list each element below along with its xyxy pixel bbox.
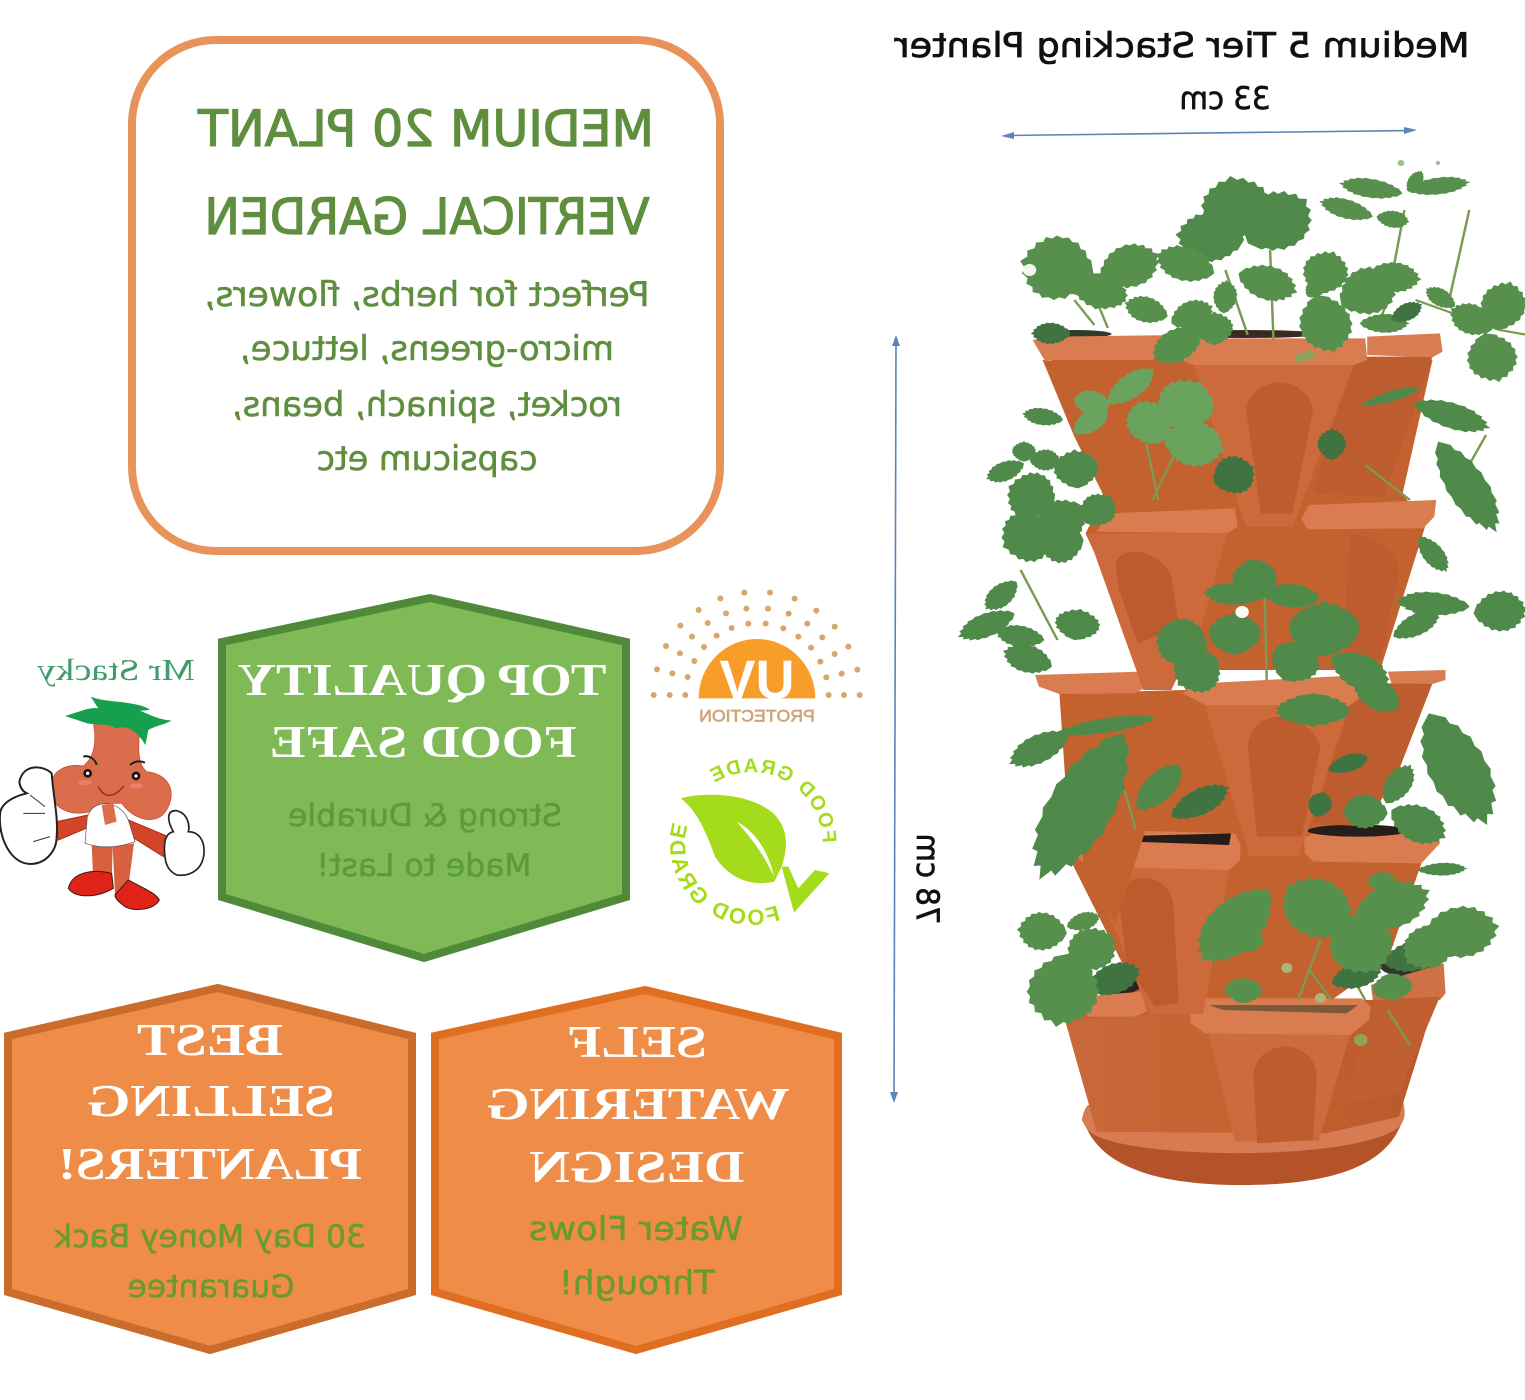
planter lower tiers — [1035, 670, 1446, 1185]
text block: water flows through: Through! — [559, 1263, 716, 1302]
label: mr stacky: Mr Stacky — [36, 652, 195, 687]
heading: medium 20 plant: MEDIUM 20 PLANT — [198, 100, 654, 158]
text block: strong and durable: Strong & Durable — [288, 798, 562, 834]
text block: plant list: micro-greens, lettuce, — [240, 329, 614, 369]
panel: top quality badge — [222, 598, 626, 958]
panel: best selling badge — [8, 988, 412, 1350]
arrow: height dimension — [890, 335, 900, 1103]
label: height 78 cm: 78 cm — [909, 834, 945, 924]
icon: uv protection: UV — [719, 648, 794, 710]
icon: food grade seal: FOOD GRADE — [709, 758, 836, 842]
heading: best selling planters: PLANTERS! — [58, 1138, 362, 1189]
icon: food grade seal — [670, 758, 836, 925]
heading: self watering design: SELF — [567, 1016, 707, 1067]
heading: self watering design — [486, 1016, 790, 1192]
icon: mr stacky mascot — [0, 697, 204, 910]
heading: self watering design: DESIGN — [530, 1141, 744, 1192]
heading: best selling planters: BEST — [137, 1014, 283, 1065]
text block: strong and durable — [288, 798, 562, 884]
text block: strong and durable: Made to Last! — [316, 848, 532, 884]
icon: uv protection — [651, 590, 863, 726]
icon: uv protection: PROTECTION — [699, 707, 815, 726]
text block: plant list: Perfect for herbs, flowers, — [204, 275, 650, 315]
heading: best selling planters — [58, 1014, 362, 1189]
arrow: width dimension — [1001, 127, 1417, 139]
panel: self watering badge — [435, 990, 838, 1350]
text block: money back guarantee — [54, 1219, 366, 1305]
heading: self watering design: WATERING — [486, 1078, 790, 1129]
strawberry leaves, lower — [1001, 665, 1514, 1032]
text block: plant list — [204, 275, 650, 479]
strawberry leaves, upper — [952, 167, 1525, 703]
strawberry fruit and flowers — [1023, 160, 1440, 1046]
heading: product name: Medium 5 Tier Stacking Planter — [894, 26, 1470, 66]
strawberry stems — [1021, 210, 1525, 1045]
label: width 33 cm: 33 cm — [1180, 81, 1270, 117]
heading: top quality food safe: FOOD SAFE — [270, 716, 576, 767]
panel: title box — [132, 40, 720, 551]
text block: plant list: rocket, spinach, beans, — [232, 385, 622, 425]
icon: food grade seal: FOOD GRADE — [670, 823, 780, 925]
heading: top quality food safe: TOP QUALITY — [238, 654, 606, 705]
heading: best selling planters: SELLING — [87, 1075, 335, 1126]
heading: top quality food safe — [238, 654, 607, 767]
text block: money back guarantee: 30 Day Money Back — [54, 1219, 366, 1255]
heading: vertical garden: VERTICAL GARDEN — [204, 188, 650, 246]
text block: water flows through: Water Flows — [529, 1209, 743, 1248]
text block: water flows through — [529, 1209, 743, 1302]
text block: money back guarantee: Guarantee — [128, 1269, 294, 1305]
text block: plant list: capsicum etc — [316, 439, 538, 479]
image: stacking planter tower — [952, 160, 1525, 1185]
planter upper tiers — [1033, 330, 1443, 690]
